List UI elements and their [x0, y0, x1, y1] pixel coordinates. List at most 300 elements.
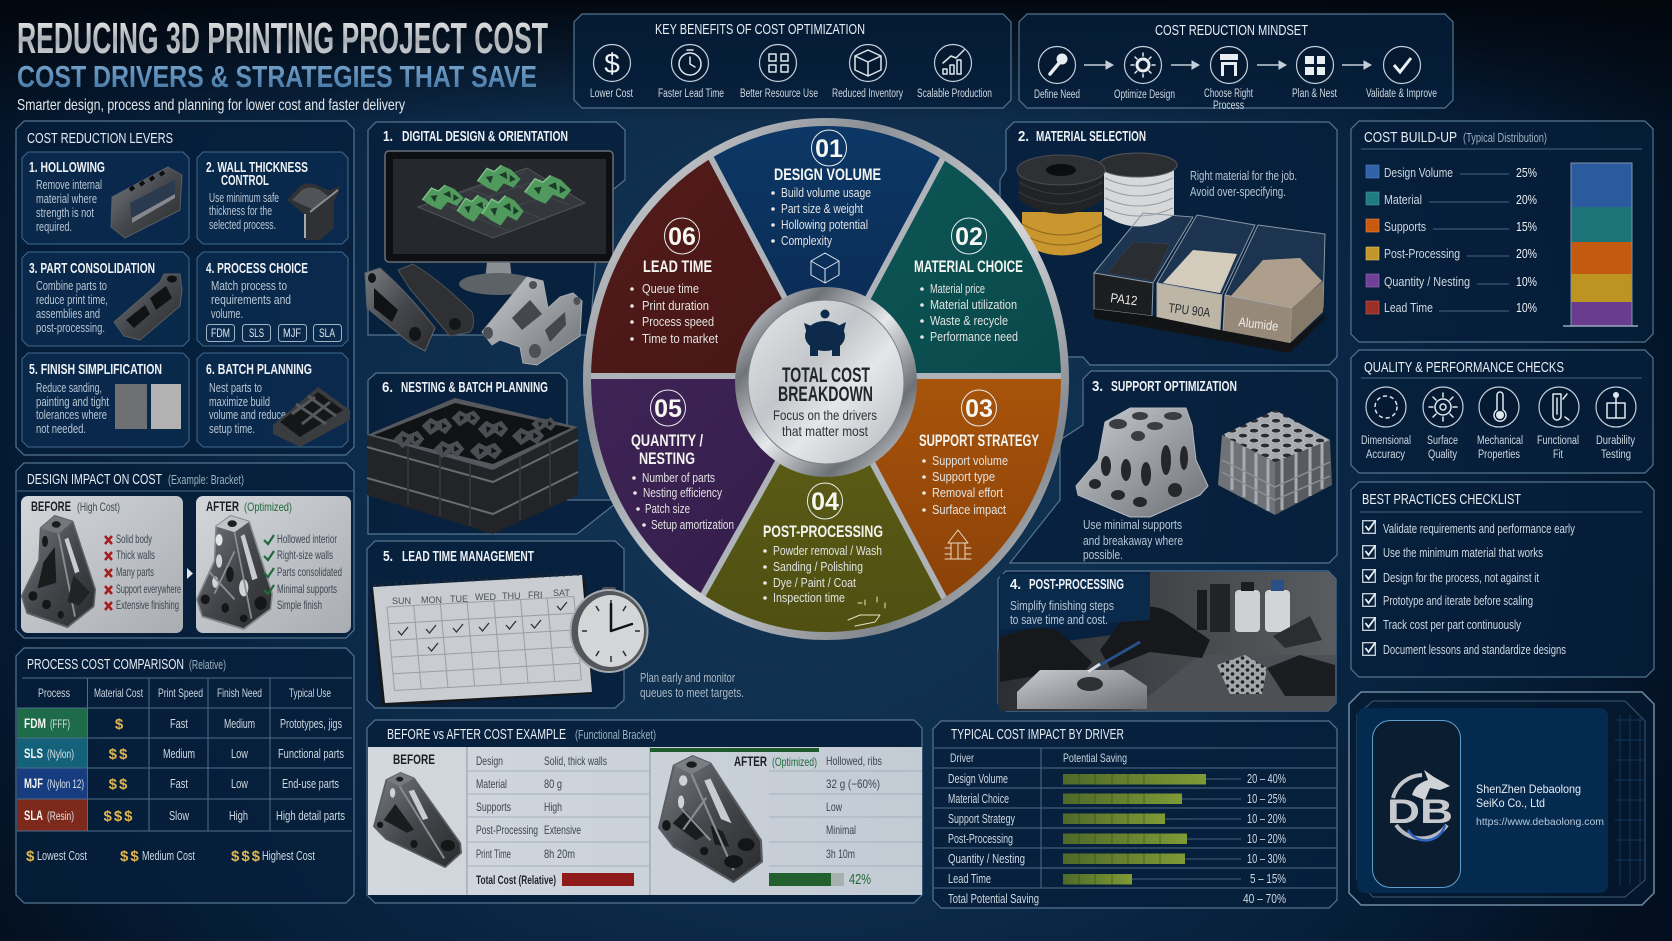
- segment 05 text: [631, 390, 734, 532]
- process chips: SLA: [319, 328, 335, 340]
- legend: 10%: [1516, 275, 1537, 289]
- card: part consolidation: post-processing.: [36, 321, 105, 335]
- segment 02 text: Material price: [930, 281, 985, 296]
- comparison table: (Optimized): [772, 755, 817, 769]
- table: High: [229, 809, 248, 823]
- calendar: [371, 574, 592, 706]
- panel: quality and performance checks: Testing: [1601, 449, 1631, 461]
- segment 03 text: [919, 390, 1039, 559]
- legend: Design Volume: [1384, 166, 1453, 180]
- card: hollowing: Remove internal: [36, 178, 102, 192]
- segment 05 text: Setup amortization: [651, 517, 734, 532]
- before card: (High Cost): [77, 500, 120, 514]
- segment 01 text: Hollowing potential: [781, 217, 868, 232]
- after card: Hollowed interior: [277, 532, 337, 546]
- table: Medium: [224, 717, 255, 731]
- comparison table: AFTER: [734, 753, 767, 769]
- legend: Highest Cost: [262, 849, 315, 863]
- segment 03 text: Support type: [932, 469, 995, 484]
- comparison table: BEFORE: [393, 751, 435, 767]
- segment 01 text: Build volume usage: [781, 185, 871, 200]
- segment 01 text: DESIGN VOLUME: [774, 165, 881, 184]
- segment 05 text: QUANTITY /: [631, 431, 703, 450]
- icon: piggy bank: [804, 310, 846, 356]
- company text: SeiKo Co., Ltd: [1476, 796, 1545, 810]
- segment 03 text: 03: [965, 395, 993, 423]
- panel: key benefits: [574, 14, 1011, 108]
- powder bins: Alumide: [1238, 314, 1279, 334]
- card: part consolidation: 3. PART CONSOLIDATION: [29, 260, 155, 277]
- table: High detail parts: [276, 809, 345, 823]
- table: Fast: [170, 777, 188, 791]
- panel: cost reduction mindset: Define Need: [1034, 89, 1080, 101]
- panel: quality and performance checks: Fit: [1553, 449, 1564, 461]
- panel: cost reduction mindset: COST REDUCTION MINDSET: [1155, 22, 1308, 39]
- subtitle: COST DRIVERS & STRATEGIES THAT SAVE: [17, 59, 537, 94]
- segment 02 text: Performance need: [930, 329, 1018, 344]
- calendar: WED: [475, 592, 496, 602]
- checklist: Design for the process, not against it: [1383, 571, 1539, 585]
- segment 05 text: Nesting efficiency: [643, 485, 722, 500]
- panel: typical cost impact by driver: Support Strategy: [948, 812, 1016, 826]
- panel: before vs after cost example: BEFORE vs AFTER COST EXAMPLE: [387, 726, 566, 743]
- panel: quality and performance checks: [1351, 350, 1653, 473]
- table: Low: [231, 777, 249, 791]
- before card: Support everywhere: [116, 582, 181, 596]
- panel: quality and performance checks: Dimensional: [1361, 435, 1411, 447]
- panel: material selection: Avoid over-specifying.: [1190, 185, 1286, 199]
- segment 04 text: [763, 483, 885, 626]
- panel: key benefits: KEY BENEFITS OF COST OPTIMIZATION: [655, 21, 865, 38]
- comparison table: 32 g (−60%): [826, 777, 880, 791]
- comparison table: 3h 10m: [826, 847, 855, 861]
- legend: Medium Cost: [142, 849, 195, 863]
- card: wall thickness control: 2. WALL THICKNESS: [206, 159, 308, 176]
- checklist: Document lessons and standardize designs: [1383, 643, 1566, 657]
- legend: $: [26, 848, 35, 865]
- tool and metal part: [1017, 642, 1147, 709]
- segment 06 text: 06: [668, 223, 696, 251]
- panel: support optimization: [1010, 371, 1337, 563]
- card: wall thickness control: selected process.: [209, 218, 276, 232]
- segment 05 text: Patch size: [645, 501, 690, 516]
- table: Finish Need: [217, 686, 262, 700]
- legend: Supports: [1384, 220, 1426, 234]
- panel: quality and performance checks: Properties: [1478, 449, 1520, 461]
- lead time note: [640, 671, 744, 700]
- table: $$: [109, 776, 129, 793]
- panel: cost reduction levers: [16, 121, 354, 455]
- panel: digital design and orientation: [365, 122, 625, 365]
- segment 05 text: 05: [654, 395, 682, 423]
- filament spools: [1017, 153, 1177, 256]
- icon: functional fit: [1539, 387, 1579, 427]
- segment 04 text: POST-PROCESSING: [763, 522, 883, 541]
- comparison table: Supports: [476, 800, 511, 814]
- card: hollowing: required.: [36, 220, 72, 234]
- table: (Resin): [47, 811, 74, 823]
- panel: key benefits: Faster Lead Time: [658, 88, 724, 100]
- calendar: SAT: [553, 588, 570, 598]
- card: process choice: Match process to: [211, 279, 287, 293]
- panel: support optimization: SUPPORT OPTIMIZATION: [1111, 378, 1237, 395]
- legend: 10%: [1516, 301, 1537, 315]
- process chips: FDM: [211, 328, 230, 340]
- legend: Lead Time: [1384, 301, 1433, 315]
- stacked bar: [1563, 163, 1638, 326]
- panel: process cost comparison: PROCESS COST COMPARISON: [27, 656, 184, 673]
- panel: post-processing: [998, 571, 1338, 712]
- panel: typical cost impact by driver: Post-Processing: [948, 832, 1013, 846]
- segment 03 text: Removal effort: [932, 485, 1003, 500]
- panel: typical cost impact by driver: Lead Time: [948, 872, 991, 886]
- card: process choice: volume.: [211, 307, 243, 321]
- segment 04 text: Dye / Paint / Coat: [773, 575, 856, 590]
- panel: typical cost impact by driver: 10 – 30%: [1247, 852, 1286, 866]
- panel: typical cost impact by driver: Design Volume: [948, 772, 1008, 786]
- panel: quality and performance checks: Quality: [1428, 449, 1457, 461]
- panel: cost build-up: COST BUILD-UP: [1364, 129, 1457, 146]
- powder bins: TPU 90A: [1168, 300, 1211, 320]
- segment: design volume: [714, 126, 940, 271]
- table: MJF: [24, 775, 43, 791]
- gloved hands: [1000, 606, 1210, 682]
- process chips: MJF: [283, 328, 301, 340]
- panel: quality and performance checks: Durability: [1596, 435, 1635, 447]
- segment 01 text: Part size & weight: [781, 201, 863, 216]
- checklist: Validate requirements and performance early: [1383, 522, 1576, 536]
- card: finish simplification: tolerances where: [36, 408, 107, 422]
- legend: 15%: [1516, 220, 1537, 234]
- header mask: to save time and cost.: [1010, 613, 1108, 627]
- comparison table: Minimal: [826, 823, 856, 837]
- panel: quality and performance checks: Mechanical: [1477, 435, 1523, 447]
- checklist: Prototype and iterate before scaling: [1383, 594, 1533, 608]
- card: batch planning: maximize build: [209, 395, 270, 409]
- comparison table: Low: [826, 800, 842, 814]
- organic support: [1076, 408, 1208, 517]
- legend: 20%: [1516, 193, 1537, 207]
- table: (Nylon 12): [47, 779, 84, 791]
- title block: [17, 14, 548, 114]
- segment 02 text: Material utilization: [930, 297, 1017, 312]
- panel: design impact on cost: DESIGN IMPACT ON COST: [27, 471, 162, 488]
- icon: lower cost: $: [604, 48, 620, 79]
- icon: mechanical properties: [1479, 387, 1519, 427]
- table: Process: [38, 686, 70, 700]
- checklist: Track cost per part continuously: [1383, 618, 1522, 632]
- arrow: [187, 568, 193, 579]
- icon: optimize design: [1124, 46, 1162, 84]
- comparison table: Material: [476, 777, 507, 791]
- after card: Right-size walls: [277, 548, 333, 562]
- checklist: Use the minimum material that works: [1383, 546, 1543, 560]
- panel: nesting and batch planning: [367, 373, 620, 534]
- calendar: SUN: [392, 596, 411, 606]
- heading: COST REDUCTION LEVERS: [27, 130, 173, 147]
- segment 04 text: Inspection time: [773, 590, 845, 605]
- centre disc: that matter most: [782, 423, 868, 439]
- card: batch planning: [197, 353, 350, 447]
- card: batch planning: setup time.: [209, 422, 255, 436]
- icon: surface quality: [1423, 387, 1463, 427]
- support note: possible.: [1083, 548, 1123, 562]
- powder bins: [1094, 213, 1325, 353]
- lead time note: Plan early and monitor: [640, 671, 735, 685]
- panel: best practices checklist: [1351, 482, 1654, 677]
- comparison table: High: [544, 800, 562, 814]
- card: hollowing: [22, 152, 189, 244]
- segment 04 text: Sanding / Polishing: [773, 559, 863, 574]
- segment 06 text: Print duration: [642, 298, 709, 313]
- card: finish simplification: not needed.: [36, 422, 86, 436]
- process chips: [206, 324, 342, 342]
- panel: typical cost impact by driver: Potential Saving: [1063, 751, 1127, 765]
- icon: dimensional accuracy: [1366, 387, 1406, 427]
- table: Material Cost: [94, 686, 143, 700]
- comparison table: Solid, thick walls: [544, 754, 607, 768]
- before card: Solid body: [116, 532, 152, 546]
- before card: Thick walls: [116, 548, 155, 562]
- arrows: [1084, 61, 1371, 69]
- panel: cost build-up: [1351, 121, 1653, 342]
- material note: Right material for the job.: [1190, 169, 1297, 183]
- after card: AFTER: [206, 498, 239, 514]
- table: [17, 678, 352, 831]
- icon: choose right process: [1210, 46, 1248, 84]
- header mask: POST-PROCESSING: [1029, 576, 1124, 593]
- segment: post-processing: [706, 464, 942, 632]
- panel: cost reduction mindset: Validate & Improve: [1366, 88, 1437, 100]
- comparison table: Post-Processing: [476, 823, 538, 837]
- segment 03 text: Support volume: [932, 453, 1008, 468]
- panel: best practices checklist: BEST PRACTICES CHECKLIST: [1362, 491, 1521, 508]
- legend: 25%: [1516, 166, 1537, 180]
- panel: design impact on cost: (Example: Bracket): [168, 472, 244, 487]
- panel: key benefits: Lower Cost: [590, 88, 634, 100]
- legend: Material: [1384, 193, 1422, 207]
- panel: lead time management: [367, 541, 648, 708]
- comparison table: Extensive: [544, 823, 581, 837]
- card: process choice: 4. PROCESS CHOICE: [206, 260, 308, 277]
- table: (FFF): [50, 719, 70, 731]
- panel: quality and performance checks: Functional: [1537, 435, 1579, 447]
- segment 02 text: Waste & recycle: [930, 313, 1008, 328]
- card: finish simplification: painting and tight: [36, 395, 109, 409]
- card: finish simplification: 5. FINISH SIMPLIFICATION: [29, 361, 162, 378]
- header mask: 4.: [1010, 576, 1021, 593]
- table: $$$: [103, 808, 135, 825]
- segment 01 text: [771, 130, 881, 283]
- after card: [196, 496, 351, 633]
- bar chart: potential saving: [1063, 774, 1241, 884]
- panel: typical cost impact by driver: 20 – 40%: [1247, 772, 1286, 786]
- panel: typical cost impact by driver: 5 – 15%: [1250, 872, 1286, 886]
- company text: [1476, 782, 1604, 828]
- card: part consolidation: [22, 252, 189, 346]
- card: part consolidation: Combine parts to: [36, 279, 107, 293]
- card: batch planning: 6. BATCH PLANNING: [206, 361, 312, 378]
- panel: cost reduction mindset: Process: [1213, 100, 1244, 112]
- table: Prototypes, jigs: [280, 717, 342, 731]
- table: SLA: [24, 807, 43, 823]
- table: Print Speed: [158, 686, 203, 700]
- header mask: [1000, 574, 1150, 630]
- card: process choice: requirements and: [211, 293, 291, 307]
- table: Typical Use: [289, 686, 331, 700]
- icon: reduced inventory: [850, 44, 886, 82]
- comparison table: Total Cost (Relative): [476, 873, 556, 887]
- clock: [570, 587, 648, 672]
- segment 01 text: 01: [815, 135, 843, 163]
- panel: cost reduction mindset: Choose Right: [1204, 88, 1254, 100]
- company text: https://www.debaolong.com: [1476, 816, 1604, 828]
- table: Functional parts: [278, 747, 344, 761]
- panel: material selection: 2.: [1018, 128, 1029, 145]
- segment 01 text: Complexity: [781, 233, 832, 248]
- panel: digital design and orientation: DIGITAL DESIGN & ORIENTATION: [402, 128, 568, 145]
- support note: [1083, 518, 1183, 562]
- panel: before vs after cost example: [367, 720, 922, 903]
- logo: DB dragon: DB: [1387, 793, 1453, 831]
- panel: quality and performance checks: QUALITY & PERFORMANCE CHECKS: [1364, 359, 1564, 376]
- segment 06 text: Queue time: [642, 281, 699, 296]
- panel: typical cost impact by driver: Material Choice: [948, 792, 1009, 806]
- dark and silver brackets: [365, 264, 582, 365]
- table: $$: [109, 746, 129, 763]
- calendar: THU: [502, 591, 520, 601]
- panel: typical cost impact by driver: Total Potential Saving: [948, 892, 1039, 906]
- panel: cost reduction mindset: [1019, 14, 1453, 112]
- table: Fast: [170, 717, 188, 731]
- legend: [26, 848, 315, 865]
- panel: key benefits: Better Resource Use: [740, 88, 818, 100]
- support note: and breakaway where: [1083, 534, 1183, 548]
- lattice support: [1218, 410, 1332, 515]
- card: part consolidation: reduce print time,: [36, 293, 108, 307]
- card: wall thickness control: [197, 152, 348, 244]
- card: finish simplification: Reduce sanding,: [36, 381, 102, 395]
- legend: 20%: [1516, 247, 1537, 261]
- segment 06 text: Time to market: [642, 331, 718, 346]
- crate of nested parts: [367, 398, 578, 534]
- segment 06 text: LEAD TIME: [643, 257, 712, 276]
- card: wall thickness control: thickness for the: [209, 204, 272, 218]
- panel: company logo card: [1349, 692, 1654, 905]
- panel: typical cost impact by driver: Driver: [950, 751, 974, 765]
- icon: scalable production: [934, 44, 972, 82]
- panel: cost reduction mindset: Optimize Design: [1114, 89, 1175, 101]
- monitor: [385, 151, 613, 295]
- after card: Parts consolidated: [277, 565, 342, 579]
- panel: lead time management: LEAD TIME MANAGEMENT: [402, 548, 534, 565]
- icon: define need: [1038, 46, 1076, 84]
- support note: Use minimal supports: [1083, 518, 1182, 532]
- segment 02 text: 02: [955, 223, 983, 251]
- segment 02 text: [914, 218, 1023, 344]
- card: process choice: [197, 252, 348, 346]
- company text: ShenZhen Debaolong: [1476, 782, 1581, 796]
- panel: material selection: MATERIAL SELECTION: [1036, 128, 1146, 145]
- panel: process cost comparison: [16, 648, 354, 903]
- calendar: FRI: [528, 590, 542, 600]
- legend: [1366, 165, 1537, 315]
- panel: quality and performance checks: Surface: [1427, 435, 1458, 447]
- panel: typical cost impact by driver: 10 – 20%: [1247, 812, 1286, 826]
- card: batch planning: Nest parts to: [209, 381, 262, 395]
- centre disc: TOTAL COST: [782, 364, 870, 387]
- panel: digital design and orientation: 1.: [383, 128, 393, 145]
- lead time note: queues to meet targets.: [640, 686, 744, 700]
- card: wall thickness control: CONTROL: [221, 172, 269, 189]
- comparison table: 8h 20m: [544, 847, 575, 861]
- card: hollowing: strength is not: [36, 206, 94, 220]
- panel: typical cost impact by driver: 40 – 70%: [1243, 892, 1286, 906]
- panel: typical cost impact by driver: 10 – 20%: [1247, 832, 1286, 846]
- icon: lower cost: [594, 44, 630, 82]
- icon: validate and improve: [1384, 46, 1420, 84]
- card: hollowing: material where: [36, 192, 97, 206]
- icon: better resource use: [760, 44, 796, 82]
- card: part consolidation: assemblies and: [36, 307, 100, 321]
- panel: nesting and batch planning: NESTING & BATCH PLANNING: [401, 379, 548, 396]
- segment 03 text: SUPPORT STRATEGY: [919, 431, 1039, 450]
- panel: typical cost impact by driver: 10 – 25%: [1247, 792, 1286, 806]
- legend: Quantity / Nesting: [1384, 275, 1470, 289]
- segment 05 text: NESTING: [639, 449, 695, 468]
- icon: faster lead time: [672, 44, 708, 82]
- after card: Minimal supports: [277, 582, 337, 596]
- workshop photo: [998, 572, 1338, 712]
- panel: typical cost impact by driver: [933, 721, 1337, 908]
- comparison table: Print Time: [476, 847, 511, 861]
- panel: nesting and batch planning: 6.: [382, 379, 393, 396]
- centre disc: [735, 287, 917, 477]
- table: End-use parts: [282, 777, 339, 791]
- tagline: Smarter design, process and planning for lower cost and faster delivery: [17, 97, 405, 114]
- after card: Simple finish: [277, 598, 322, 612]
- header mask: Simplify finishing steps: [1010, 599, 1114, 613]
- table: Slow: [169, 809, 190, 823]
- panel: lead time management: 5.: [383, 548, 393, 565]
- logo: DB dragon: [1387, 770, 1453, 840]
- panel: cost reduction mindset: Plan & Nest: [1292, 88, 1338, 100]
- panel: cost build-up: (Typical Distribution): [1463, 130, 1547, 145]
- title: REDUCING 3D PRINTING PROJECT COST: [17, 14, 548, 63]
- before card: BEFORE: [31, 498, 71, 514]
- before card: [21, 496, 183, 633]
- icon: durability testing: [1596, 387, 1636, 427]
- before card: Many parts: [116, 565, 154, 579]
- calendar: TUE: [450, 594, 468, 604]
- segment: lead time: [591, 160, 782, 373]
- segment 06 text: [630, 218, 718, 346]
- outer ring: [587, 122, 1065, 636]
- chart: total cost wheel: [583, 118, 1069, 640]
- legend: $$: [120, 848, 141, 865]
- panel: before vs after cost example: (Functional Bracket): [575, 727, 656, 742]
- table: $: [115, 716, 124, 733]
- checklist: [1363, 520, 1576, 657]
- segment 06 text: Process speed: [642, 314, 714, 329]
- segment: material choice: [870, 161, 1061, 373]
- panel: process cost comparison: (Relative): [189, 657, 226, 672]
- table: Medium: [163, 747, 195, 761]
- panel: typical cost impact by driver: TYPICAL COST IMPACT BY DRIVER: [951, 726, 1124, 743]
- centre disc: BREAKDOWN: [778, 383, 873, 406]
- comparison table: [368, 747, 922, 895]
- after card: (Optimized): [244, 500, 292, 514]
